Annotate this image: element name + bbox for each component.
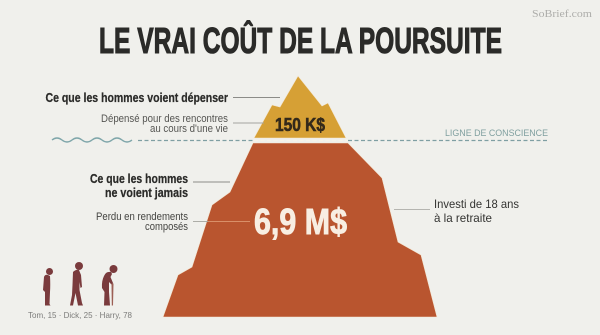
label: invested from 18: Investi de 18 ans [434,197,519,211]
label: spent on dating: au cours d'une vie [150,123,228,135]
awareness line [52,138,548,142]
figure: Dick [70,262,83,306]
label: invested from 18 [394,197,519,225]
label: spent on dating: Dépensé pour des rencontres [101,113,228,125]
label: what men see spent: Ce que les hommes voient dépenser [46,90,228,105]
label: invested from 18: à la retraite [434,211,492,225]
label: spent on dating [101,113,264,135]
watermark: SoBrief.com [532,9,592,20]
value: 6,9 M$: 6,9 M$ [254,201,347,242]
figure: Harry [102,265,118,306]
icon: three men aging [43,262,118,306]
label: what men never see: ne voient jamais [105,185,188,200]
awareness line label: LIGNE DE CONSCIENCE [445,128,548,139]
iceberg: submerged cost [163,143,437,317]
label: lost returns [96,211,250,233]
label: lost returns: composés [145,221,188,233]
value: 150 K$: 150 K$ [275,114,326,135]
figure: Tom [43,268,53,306]
figures caption: Tom, 15 · Dick, 25 · Harry, 78 [28,310,132,320]
iceberg: visible cost [254,76,346,138]
label: what men never see [90,171,230,200]
label: lost returns: Perdu en rendements [96,211,188,223]
label: what men never see: Ce que les hommes [90,171,188,186]
